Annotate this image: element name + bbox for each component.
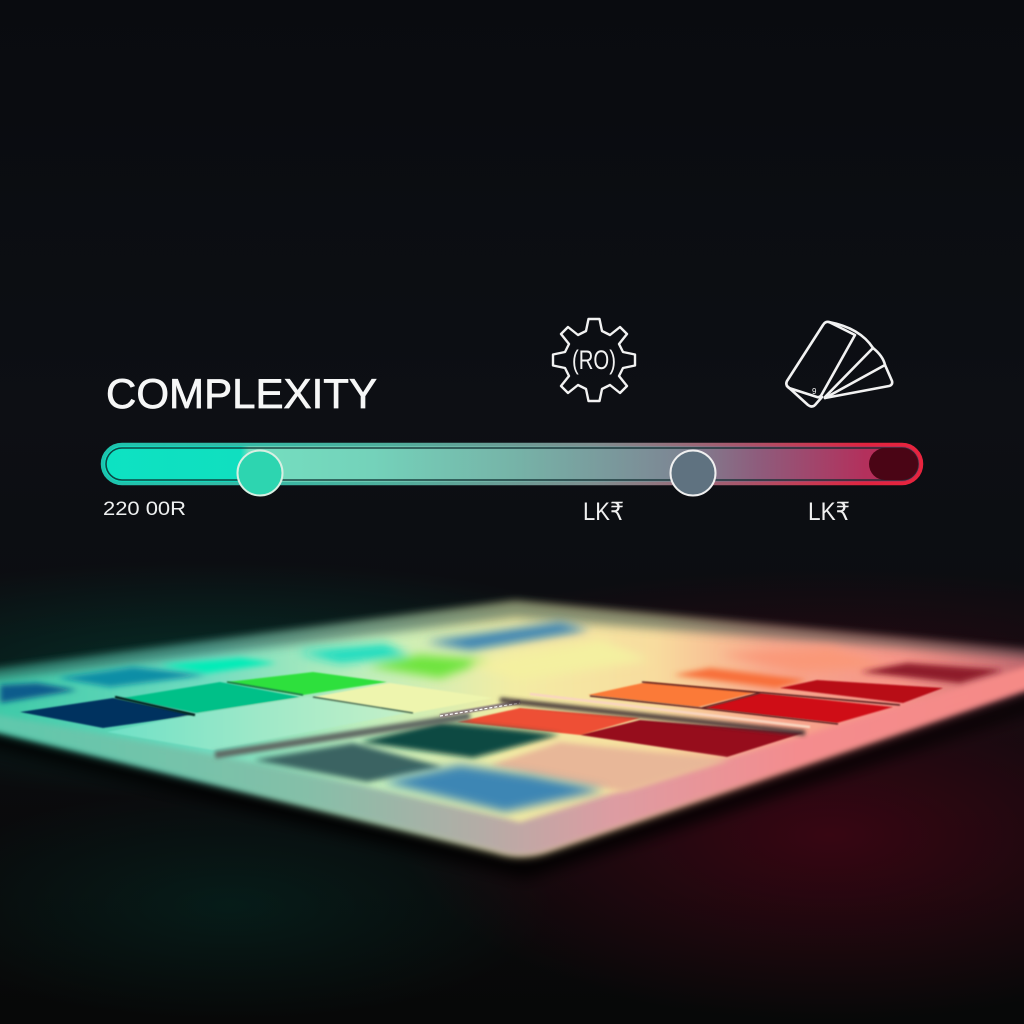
sharp middle cells <box>20 672 943 757</box>
icon: gear <box>553 319 635 401</box>
knob: medium <box>670 450 716 496</box>
front frame strip <box>0 656 1024 855</box>
soft front cells <box>253 722 730 792</box>
icon: fanned cards: 9 <box>812 387 817 396</box>
label: medium: LK₹ <box>583 498 624 526</box>
slider end cap <box>869 448 918 480</box>
knob: low <box>238 450 282 496</box>
icon: gear: (RO) <box>572 345 616 375</box>
icon: fanned cards <box>786 322 892 406</box>
slider track <box>102 444 922 484</box>
title: COMPLEXITY <box>106 370 377 417</box>
label: high: LK₹ <box>808 498 850 526</box>
board base <box>0 603 1024 855</box>
board shadow <box>0 690 1024 878</box>
back edge dimming <box>0 603 1024 684</box>
colour grid board <box>0 603 1024 855</box>
complexity slider <box>102 444 922 496</box>
label: low: 220 00R <box>103 499 186 520</box>
blue front cell <box>383 765 605 812</box>
back row cells <box>297 622 890 680</box>
soft far cells <box>0 658 1003 703</box>
divider lines <box>115 682 900 755</box>
